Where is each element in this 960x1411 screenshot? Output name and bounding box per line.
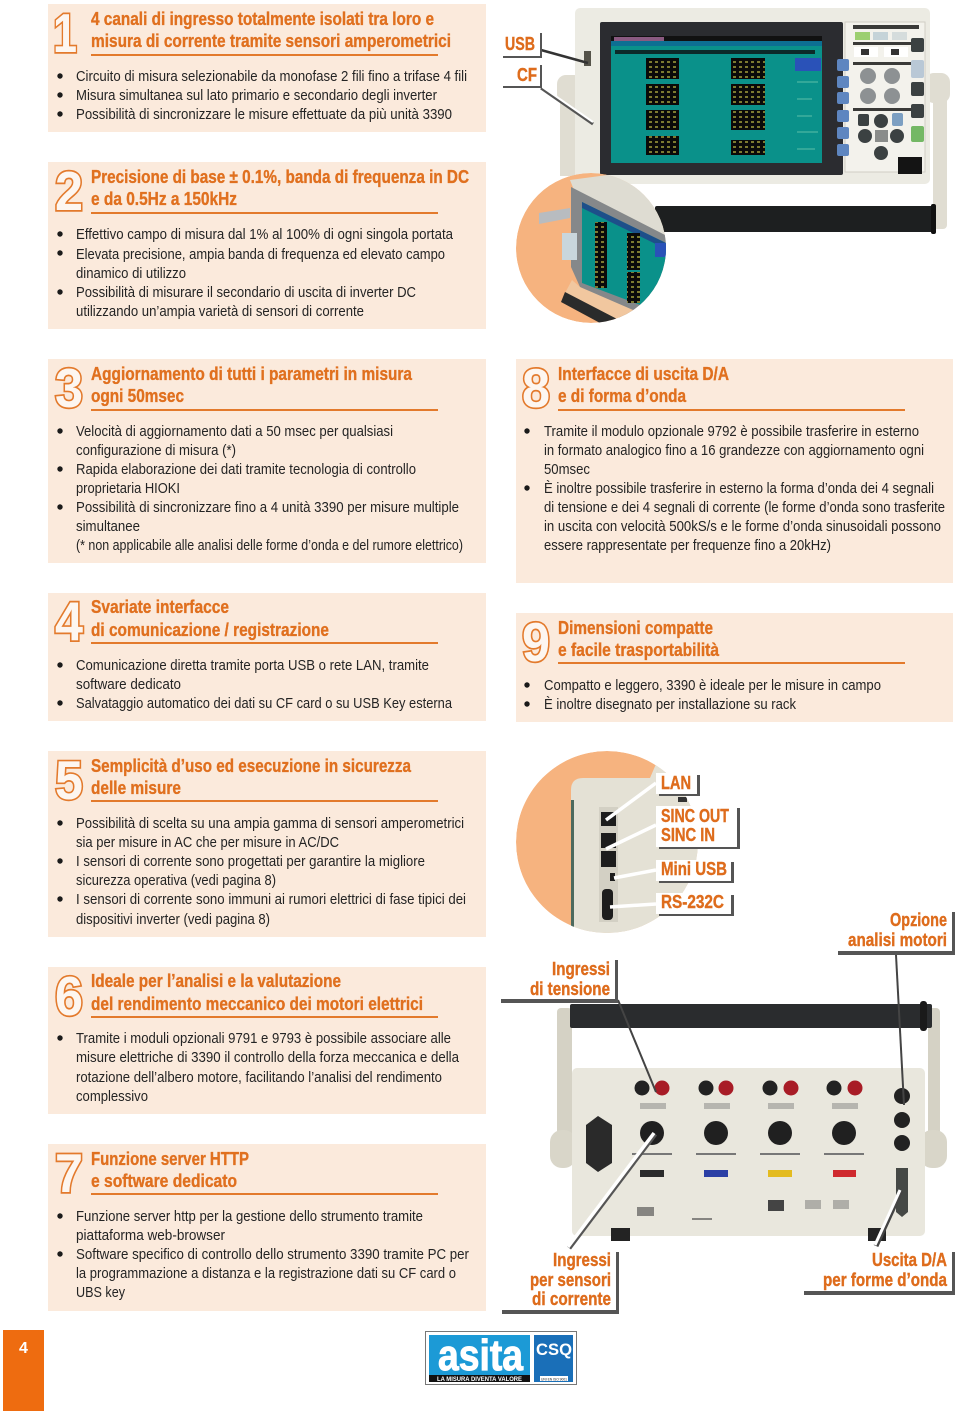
bullet list 3 <box>57 423 463 554</box>
control panel <box>853 25 924 174</box>
bullet list 3: (* non applicabile alle analisi delle forme d’onda e del rumore elettrico) <box>76 537 463 554</box>
number 6: 6 <box>55 965 83 1027</box>
instrument top edge <box>570 175 665 235</box>
inset circle: rear ports close-up <box>516 751 700 934</box>
label: SINC OUT / SINC IN <box>656 805 740 849</box>
bullet list 3: proprietaria HIOKI <box>76 480 180 497</box>
bullet list 4: Comunicazione diretta tramite porta USB o rete LAN, tramite <box>76 657 429 674</box>
bullet list 7 <box>57 1208 469 1301</box>
bullet list 6: misure elettriche di 3390 il controllo della forza meccanica e della <box>76 1049 460 1066</box>
bullet list 2: utilizzando un’ampia varietà di sensori di corrente <box>76 303 364 320</box>
handle close-up <box>561 292 616 322</box>
BNC outputs <box>894 1088 910 1151</box>
panel 4: interfaces <box>48 590 486 721</box>
bullet list 8: 50msec <box>544 461 590 478</box>
bullet list 6 <box>57 1030 460 1105</box>
callout: USB: USB <box>505 33 535 54</box>
USB slot <box>584 51 591 66</box>
bullet list 3: Possibilità di sincronizzare fino a 4 unità 3390 per misure multiple <box>76 499 459 516</box>
photo: front of instrument <box>557 8 950 234</box>
bullet list 4 <box>57 657 453 712</box>
bullet list 5 <box>57 815 466 928</box>
callout: Ingressi per sensori di corrente: di corrente <box>532 1288 611 1309</box>
heading 6: Ideale per l’analisi e la valutazione <box>91 970 341 991</box>
feet <box>611 1228 630 1241</box>
screen bezel <box>600 22 843 175</box>
heading 8 <box>558 363 905 410</box>
heading 2: Precisione di base ± 0.1%, banda di frequenza in DC <box>91 166 469 187</box>
bullet list 9: Compatto e leggero, 3390 è ideale per le misure in campo <box>544 677 881 694</box>
heading 5 <box>91 755 438 801</box>
label: LAN: LAN <box>661 772 691 793</box>
panel 5: simplicity and safety <box>48 749 486 937</box>
callout: Ingressi per sensori di corrente <box>502 1133 655 1314</box>
logo: asita CSQ: UNI EN ISO 9001 <box>541 1376 568 1382</box>
bullet list 5: sia per misure in AC che per misure in AC/DC <box>76 834 339 851</box>
heading 5: delle misure <box>91 777 181 798</box>
bullet list 5: Possibilità di scelta su una ampia gamma di sensori amperometrici <box>76 815 464 832</box>
rating marks <box>637 1200 849 1220</box>
bullet list 2: Effettivo campo di misura dal 1% al 100% di ogni singola portata <box>76 226 454 243</box>
soft keys <box>837 59 849 156</box>
bullet list 8: Tramite il modulo opzionale 9792 è possibile trasferire in esterno <box>544 423 919 440</box>
rear handle <box>557 1008 572 1138</box>
bullet list 8: essere rappresentate per frequenze fino a 20kHz) <box>544 537 831 554</box>
heading 2: e da 0.5Hz a 150kHz <box>91 188 237 209</box>
heading 6: del rendimento meccanico dei motori elettrici <box>91 993 423 1014</box>
heading 3: Aggiornamento di tutti i parametri in misura <box>91 363 413 384</box>
callout: Ingressi per sensori di corrente: per sensori <box>530 1269 611 1290</box>
bullet list 7: Funzione server http per la gestione dello strumento tramite <box>76 1208 423 1225</box>
bezel <box>571 187 669 325</box>
heading 1 <box>91 8 451 55</box>
number 8: 8 <box>522 357 550 419</box>
heading 7: e software dedicato <box>91 1170 237 1191</box>
handle brackets <box>557 73 950 229</box>
black carrying handle <box>655 206 933 232</box>
panel 3: parameter update <box>48 357 486 563</box>
bullet list 7: la programmazione a distanza e la registrazione dati su CF card o <box>76 1265 456 1282</box>
callout: Ingressi di tensione <box>501 958 656 1092</box>
callout: Ingressi di tensione: di tensione <box>530 978 610 999</box>
number 7: 7 <box>55 1142 83 1204</box>
number 2: 2 <box>55 160 83 222</box>
bullet list 5: I sensori di corrente sono progettati per garantire la migliore <box>76 853 425 870</box>
number 3: 3 <box>55 357 83 419</box>
port recess <box>599 807 618 922</box>
bullet list 9: È inoltre disegnato per installazione su rack <box>544 696 796 713</box>
rear body <box>572 1068 925 1236</box>
heading 3 <box>91 363 438 410</box>
callout: Ingressi di tensione: Ingressi <box>552 958 610 979</box>
bullet list 6: rotazione dell’albero motore, facilitando l’analisi del rendimento <box>76 1069 442 1086</box>
teal screen <box>582 202 668 306</box>
heading 7: Funzione server HTTP <box>91 1148 249 1169</box>
page number tab <box>3 1330 44 1411</box>
power inlet <box>586 1116 612 1172</box>
callout: USB <box>503 33 588 63</box>
label: SINC OUT / SINC IN: SINC IN <box>661 824 715 845</box>
callout: Opzione analisi motori <box>838 909 955 1105</box>
channel tags <box>640 1170 664 1177</box>
heading 6 <box>91 970 438 1017</box>
number 1: 1 <box>53 2 77 64</box>
number 9: 9 <box>522 611 550 673</box>
number 4: 4 <box>55 590 83 652</box>
bullet list 7: piattaforma web-browser <box>76 1227 225 1244</box>
panel 2: base accuracy <box>48 160 486 329</box>
panel 7: HTTP server <box>48 1142 486 1311</box>
voltage terminals <box>634 1080 842 1096</box>
bullet list 6: complessivo <box>76 1088 148 1105</box>
bullet list 7: Software specifico di controllo dello strumento 3390 tramite PC per <box>76 1246 469 1263</box>
bullet list 1 <box>57 68 467 123</box>
bullet list 5: sicurezza operativa (vedi pagina 8) <box>76 872 276 889</box>
bullet list 2: Possibilità di misurare il secondario di uscita di inverter DC <box>76 284 416 301</box>
bullet list 3: configurazione di misura (*) <box>76 442 236 459</box>
number 5: 5 <box>55 749 83 811</box>
panel 1: isolated input channels <box>48 2 486 132</box>
heading 4 <box>91 596 438 643</box>
screen <box>611 36 822 163</box>
heading 8: Interfacce di uscita D/A <box>558 363 729 384</box>
port leader lines <box>606 783 656 907</box>
panel 6: motor analysis <box>48 965 486 1114</box>
heading 4: di comunicazione / registrazione <box>91 619 329 640</box>
panel 8: D/A output <box>516 357 953 583</box>
bullet list 6: Tramite i moduli opzionali 9791 e 9793 è possibile associare alle <box>76 1030 451 1047</box>
bullet list 9 <box>524 677 881 713</box>
heading 1: misura di corrente tramite sensori amperometrici <box>91 30 451 51</box>
bullet list 4: Salvataggio automatico dei dati su CF card o su USB Key esterna <box>76 695 453 712</box>
bullet list 1: Possibilità di sincronizzare le misure effettuate da più unità 3390 <box>76 106 452 123</box>
bullet list 3: simultanee <box>76 518 140 535</box>
callout: Ingressi per sensori di corrente: Ingressi <box>553 1249 611 1270</box>
label: RS-232C: RS-232C <box>661 891 724 912</box>
callout: CF <box>503 64 593 124</box>
heading 7 <box>91 1148 438 1194</box>
bullet list 5: dispositivi inverter (vedi pagina 8) <box>76 911 270 928</box>
bullet list 7: UBS key <box>76 1284 125 1301</box>
bullet list 2: dinamico di utilizzo <box>76 265 186 282</box>
heading 9 <box>558 617 905 663</box>
callout: CF: CF <box>517 64 537 85</box>
label: Mini USB: Mini USB <box>661 858 727 879</box>
logo: asita CSQ: LA MISURA DIVENTA VALORE <box>437 1376 523 1383</box>
bullet list 2: Elevata precisione, ampia banda di frequenza ed elevato campo <box>76 246 445 263</box>
inset circle: card slots close-up <box>516 173 669 330</box>
bullet list 4: software dedicato <box>76 676 181 693</box>
heading 1: 4 canali di ingresso totalmente isolati tra loro e <box>91 8 434 29</box>
page number tab: 4 <box>19 1340 28 1357</box>
instrument side <box>571 764 700 934</box>
panel 9: compact size <box>516 611 953 722</box>
label: SINC OUT / SINC IN: SINC OUT <box>661 805 730 826</box>
photo: rear of instrument <box>550 1001 947 1241</box>
memory cards <box>539 208 570 224</box>
bullet list 1: Misura simultanea sul lato primario e secondario degli inverter <box>76 87 437 104</box>
bullet list 3: Rapida elaborazione dei dati tramite tecnologia di controllo <box>76 461 416 478</box>
bullet list 2 <box>57 226 454 320</box>
heading 3: ogni 50msec <box>91 385 184 406</box>
callout: Uscita D/A per forme d'onda <box>804 1190 955 1295</box>
instrument body <box>575 8 930 184</box>
bullet list 1: Circuito di misura selezionabile da monofase 2 fili fino a trifase 4 fili <box>76 68 467 85</box>
heading 9: e facile trasportabilità <box>558 639 720 660</box>
logo: asita CSQ <box>426 1331 576 1384</box>
bullet list 5: I sensori di corrente sono immuni ai rumori elettrici di fase tipici dei <box>76 891 466 908</box>
side bulges <box>550 1130 576 1168</box>
logo: asita CSQ: asita <box>438 1331 523 1380</box>
heading 9: Dimensioni compatte <box>558 617 713 638</box>
D-sub connector <box>896 1168 908 1217</box>
heading 4: Svariate interfacce <box>91 596 229 617</box>
current sensor connectors <box>640 1121 856 1145</box>
bullet list 8 <box>524 423 945 554</box>
heading 2 <box>91 166 469 213</box>
logo: asita CSQ: CSQ <box>536 1340 572 1359</box>
bottom frame <box>566 280 633 320</box>
bullet list 3: Velocità di aggiornamento dati a 50 msec per qualsiasi <box>76 423 393 440</box>
heading 8: e di forma d’onda <box>558 385 687 406</box>
heading 5: Semplicità d’uso ed esecuzione in sicurezza <box>91 755 412 776</box>
